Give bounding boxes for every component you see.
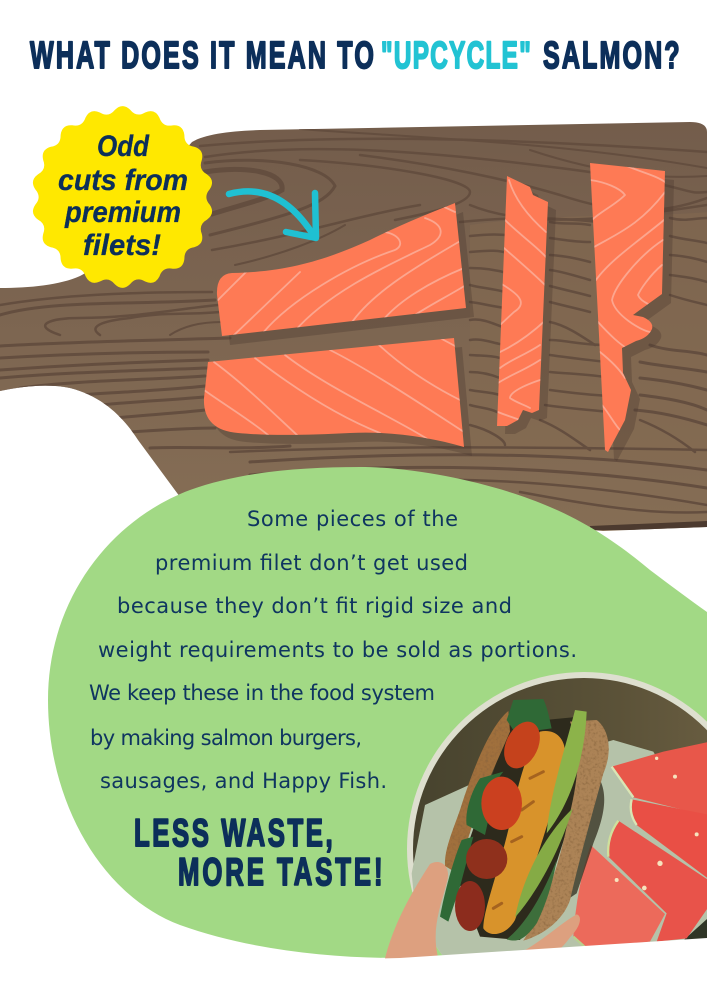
- spinach leaves: [440, 699, 552, 922]
- green blob panel: [48, 467, 707, 958]
- yellow scalloped badge: [17, 93, 228, 301]
- badge text: Odd: [97, 130, 150, 163]
- right bun: [523, 720, 609, 941]
- salmon piece: upper wide cut: [217, 203, 474, 345]
- tagline: [134, 812, 383, 894]
- white bottom edge cutting the photo: [370, 938, 707, 1000]
- left bun: [445, 711, 510, 873]
- title: SALMON?: [543, 34, 680, 76]
- watermelon slices: [573, 742, 707, 953]
- sandwich filling shadow: [457, 717, 580, 940]
- hand: [385, 862, 580, 958]
- tagline: MORE TASTE!: [178, 851, 383, 894]
- salmon piece: narrow middle strip: [497, 176, 556, 434]
- body text: sausages, and Happy Fish.: [100, 769, 387, 793]
- title: "UPCYCLE": [381, 33, 531, 76]
- bun shadow: [547, 780, 604, 913]
- tagline: LESS WASTE,: [134, 812, 333, 855]
- teal arrow: [229, 191, 316, 238]
- salmon sausage: [483, 731, 565, 934]
- badge text: filets!: [83, 229, 161, 262]
- salmon piece: irregular right strip: [590, 163, 674, 461]
- body text: [89, 507, 577, 793]
- salmon piece: lower wide cut: [204, 338, 472, 456]
- badge shape: [17, 93, 228, 301]
- body text: by making salmon burgers,: [90, 726, 362, 750]
- cutting board: [0, 122, 707, 531]
- photo: salmon sausage sandwich and watermelon on a plate: [385, 672, 707, 958]
- body text: premium filet don’t get used: [155, 551, 468, 575]
- body text: We keep these in the food system: [89, 681, 435, 705]
- badge text: [58, 130, 188, 262]
- plate: [407, 672, 707, 956]
- badge text: premium: [64, 196, 181, 229]
- body text: because they don’t fit rigid size and: [117, 594, 512, 618]
- body text: Some pieces of the: [247, 507, 458, 531]
- avocado slices: [507, 710, 587, 940]
- badge text: cuts from: [58, 164, 188, 197]
- title: WHAT DOES IT MEAN TO: [30, 34, 374, 76]
- title: [30, 33, 680, 76]
- tomatoes: [455, 716, 547, 931]
- body text: weight requirements to be sold as portions.: [98, 638, 577, 662]
